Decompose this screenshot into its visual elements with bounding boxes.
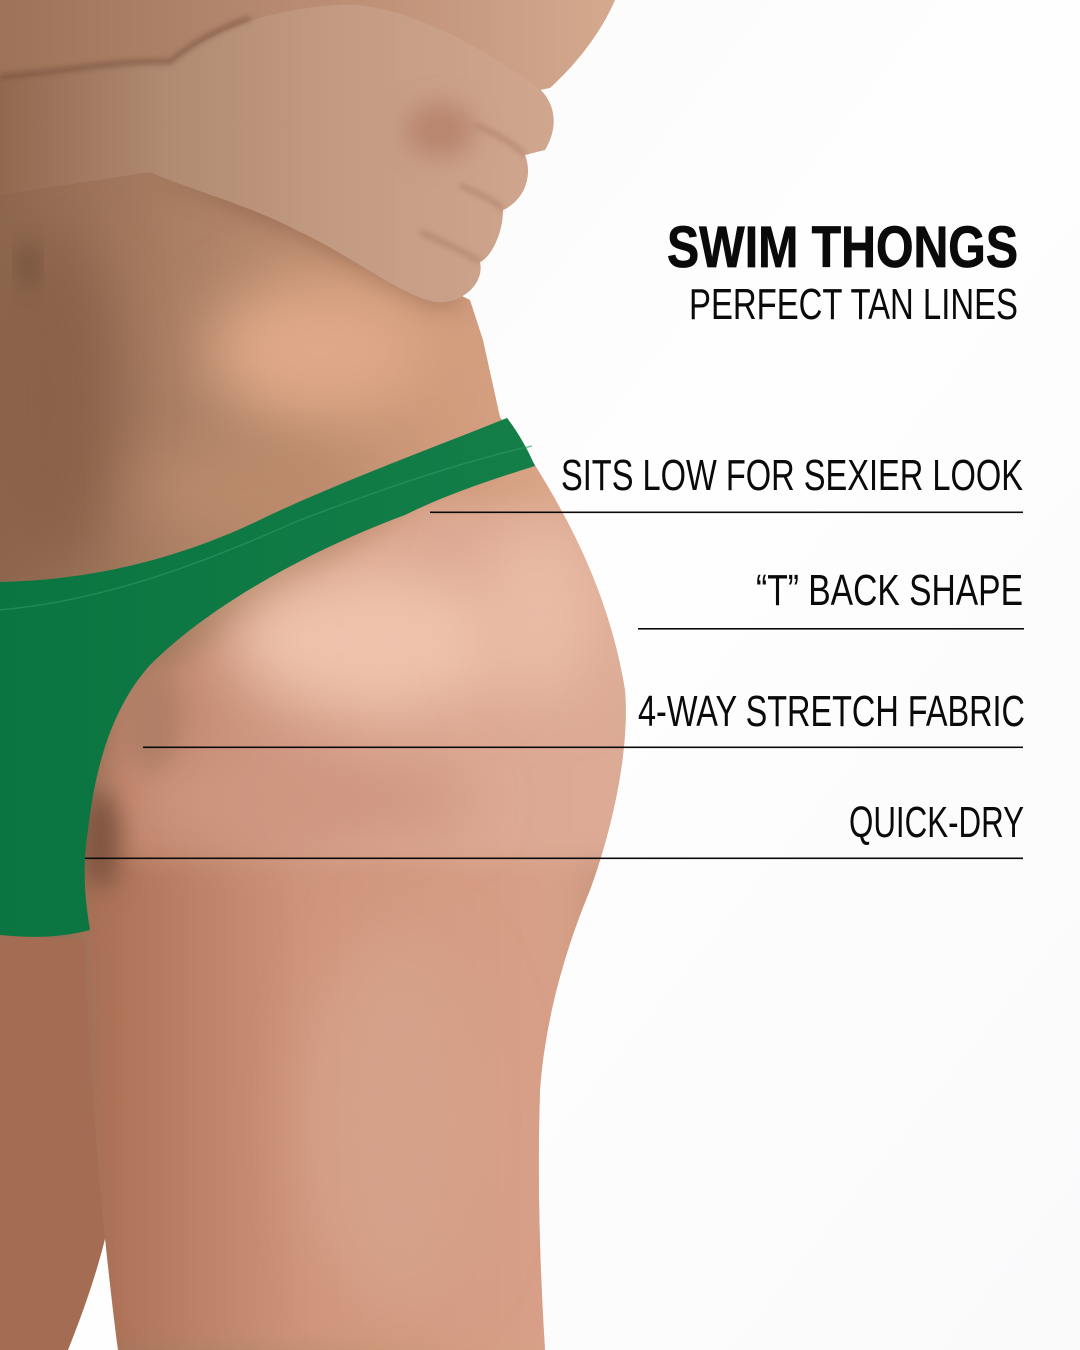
waistband stitching [0, 446, 532, 610]
shadow under hand [188, 188, 466, 314]
knuckle shading [405, 102, 475, 158]
gap between arms [0, 18, 250, 76]
upper arm [0, 0, 615, 110]
green garment [0, 418, 535, 937]
navel [20, 243, 36, 287]
finger creases [420, 125, 525, 262]
back leg [0, 930, 106, 1350]
shading on hip and thigh [0, 175, 640, 1350]
title: SWIM THONGS [667, 215, 1018, 280]
photo: model wearing green swim thong [0, 0, 640, 1350]
torso and hip [0, 170, 626, 1350]
forearm and hand [0, 5, 554, 302]
